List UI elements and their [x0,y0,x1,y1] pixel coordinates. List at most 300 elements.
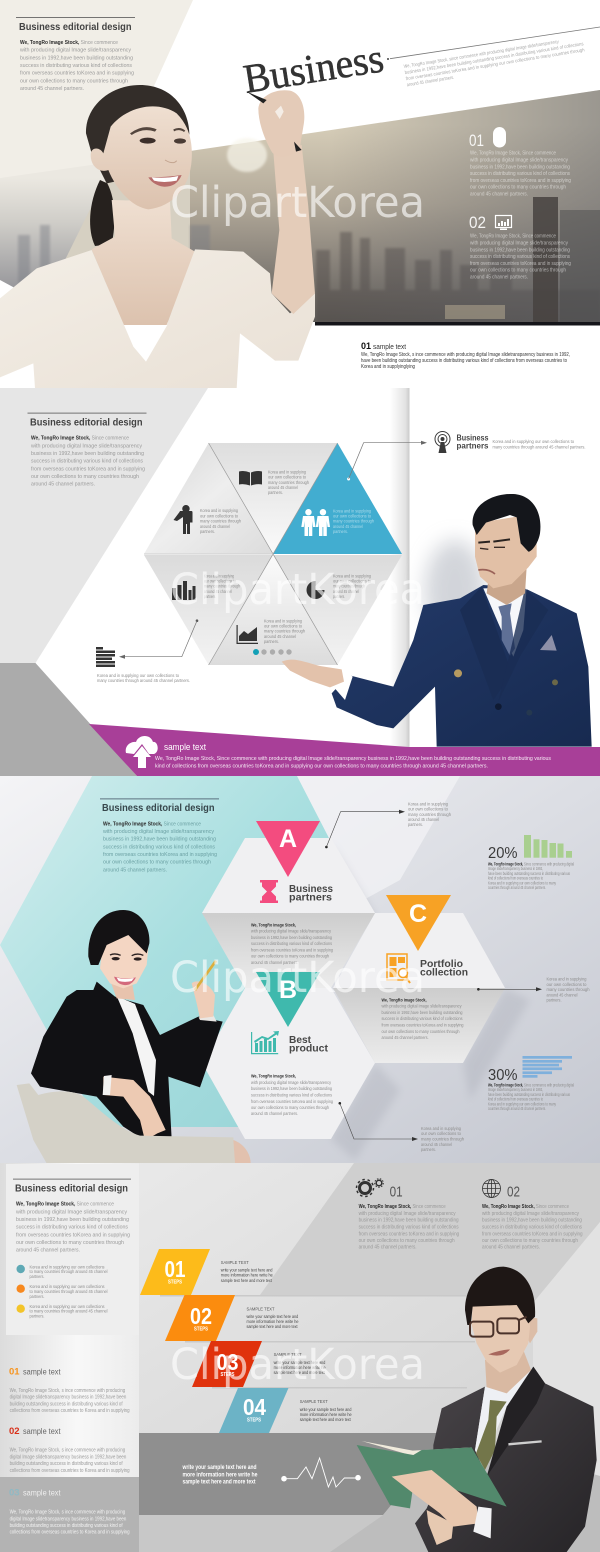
sidebar item 01: 01 [9,1366,20,1378]
top item 02 with globe: 02 [507,1184,520,1200]
top item 02 with globe: We, TongRo Image Stock, Since commence [482,1204,569,1210]
callout: business partners: Business [456,433,489,443]
text: blue triangle: our own collections to [333,514,371,519]
body text B: from overseas countries toKorea and in supplying [251,1099,333,1104]
sidebar item 02: digital Image slidetransparency business in 1992,have been [10,1454,126,1460]
sidebar item 02 [9,1426,130,1474]
step 02: SAMPLE TEXT [246,1306,275,1312]
stat: 30 percent with blue bars: Image slide/transparency business in 1992, [488,1087,543,1092]
footnote 01 sample text: Korea and in supplyinglying [361,364,415,370]
text: person triangle: partners. [200,529,215,534]
step 02: 02 [190,1303,212,1329]
heading block: with producing digital Image slide/transparency [103,829,214,835]
heading block: business in 1992,have been building outstanding [20,55,133,61]
body text A: our own collections to many countries through [251,954,329,958]
stat: 20 percent with green bars: We, TongRo Image Stock, Since commence with producing digital [488,862,574,866]
step 02: STEPS [194,1326,208,1332]
triangle C [386,895,451,951]
photo: man in navy suit [282,494,592,747]
triangle A [256,821,320,877]
callout: bottom right: our own collections to [421,1131,461,1136]
top item 01 with gears: business in 1992,have been building outstanding [359,1218,459,1224]
stat: 30 percent with blue bars: kind of collections from overseas countries to [488,1096,543,1102]
step 03: 03 [216,1349,238,1375]
text: bar chart triangle: partners. [204,594,216,599]
callout: bottom right: many countries through [421,1136,464,1142]
body text A [251,922,333,965]
callout: business partners: many countries through around 45 channel partners. [492,444,586,450]
heading block: success in distributing various kind of collections [20,63,132,69]
icon: antenna [435,432,450,453]
hexagon diagram [144,443,402,665]
stat: 30 percent with blue bars [488,1056,574,1111]
footnote 01 sample text [361,341,570,370]
stat: 20 percent with green bars: 20% [488,845,518,862]
legend: coloured dots: partners. [30,1294,44,1299]
text: pie chart triangle: Korea and in supplying [333,574,371,578]
body text B: success in distributing various kind of collections [251,1092,333,1098]
city skyline photo [0,90,600,322]
icon: mouse [493,127,506,148]
icon: globe [482,1180,500,1198]
sidebar item 03: building outstanding success in distributing various kind of [10,1523,123,1529]
watermark 1: ClipartKorea [170,178,425,228]
blue bar chart [522,1056,572,1078]
top item 02 with globe: our own collections to many countries through [482,1238,578,1244]
stat: 20 percent with green bars: kind of collections from overseas countries to [488,876,543,880]
heading block: We, TongRo Image Stock, Since commence [31,436,129,442]
hexagon C [333,895,505,1063]
item 01 with mouse icon: from overseas countries toKorea and in supplying [470,178,571,184]
photo: woman writing in the air [0,85,315,388]
hexagon C: C [409,900,427,928]
text: blue triangle [333,508,374,534]
callout: top right: our own collections to [408,806,448,812]
top item 01 with gears: We, TongRo Image Stock, Since commence [359,1204,446,1210]
body text A: around 45 channel partners. [251,960,298,965]
heading block [28,413,146,488]
stat: 20 percent with green bars: countries through around 45 channel partners. [488,885,546,890]
sidebar item 03: collections from overseas countries to Korea and in supplying [10,1530,130,1536]
callout: middle right: our own collections to [546,982,587,987]
step 02 [165,1295,299,1341]
legend: coloured dots [16,1264,108,1318]
item 01 with mouse icon: our own collections to many countries through [470,185,566,191]
heading block: Business editorial design [19,21,132,33]
icon: monitor [496,216,512,230]
text: book triangle: Korea and in supplying [268,470,306,474]
watermark 2: ClipartKorea [170,565,425,615]
text: book triangle: many countries through [268,480,309,485]
grey band with pulse line: sample text here and more text [182,1480,256,1486]
callout: document: Korea and in supplying our own collections to [97,673,179,678]
top item 02 with globe: around 45 channel partners. [482,1245,540,1251]
callout: middle right [477,976,590,1002]
callout: business partners [347,432,586,480]
hexagon A: A [279,825,297,853]
legend: coloured dots: Korea and in supplying our own collections [30,1284,104,1289]
heading block: We, TongRo Image Stock, Since commence [103,821,201,827]
heading block: Business editorial design [30,416,142,428]
heading block: Business editorial design [102,802,214,814]
text: book triangle [268,470,309,495]
top item 01 with gears: 01 [390,1184,403,1200]
watermark 4: ClipartKorea [170,1340,425,1390]
grey band with pulse line: write your sample text here and [182,1465,257,1471]
step 04: more information here write he [300,1412,352,1417]
item 02 with monitor icon: 02 [469,213,486,232]
callout: top right [325,802,451,848]
step 03: write your sample text here and [274,1360,326,1365]
text: blue triangle: around 45 channel [333,524,363,529]
purple banner: sample text [164,742,206,753]
heading block: around 45 channel partners. [16,1248,80,1254]
heading block: around 45 channel partners. [31,482,95,488]
body text C: with producing digital Image slide/transparency [382,1004,462,1008]
item 02 with monitor icon: our own collections to many countries through [470,268,566,274]
heading block: around 45 channel partners. [20,86,84,92]
watermark 3: ClipartKorea [170,953,425,1003]
panel: A B C hexagons layout [0,776,600,1163]
icon: bar chart [172,581,196,600]
step 04: sample text here and more text [300,1417,351,1422]
text: person triangle: our own collections to [200,514,238,518]
hexagon shadows [331,842,530,1160]
top item 01 with gears: around 45 channel partners. [359,1245,417,1251]
hexagon B: product [289,1042,329,1054]
text: person triangle: many countries through [200,518,241,524]
sidebar item 02: sample text [23,1427,61,1436]
heading block: from overseas countries toKorea and in supplying [103,852,217,858]
callout: top right: partners. [408,822,423,827]
heading block [16,17,135,92]
body text A: from overseas countries toKorea and in supplying [251,948,333,952]
rotated intro text: We, TongRo Image Stock, since commence with producing digital Image slide/transparency [403,39,560,70]
footnote 01 sample text: sample text [373,344,406,351]
grey band with pulse line: more information here write he [182,1472,258,1478]
item 01 with mouse icon [469,127,571,197]
body text C: business in 1992,have been building outstanding [382,1010,463,1015]
step 03 [192,1341,326,1387]
stat: 20 percent with green bars: Image slide/transparency business in 1992, [488,866,543,871]
top item 02 with globe: from overseas countries toKorea and in supplying [482,1231,583,1237]
item 01 with mouse icon: with producing digital Image slide/transparency [470,158,568,164]
sidebar item 01: collections from overseas countries to Korea and in supplying [10,1408,130,1414]
icon: two people [301,509,330,536]
panel: hexagon on hand layout [0,388,600,776]
top item 01 with gears: our own collections to many countries through [359,1238,455,1244]
callout: top right: many countries through [408,812,451,817]
heading block: with producing digital Image slide/transparency [16,1209,127,1215]
icon: cloud upload [126,736,158,768]
sidebar item 02: building outstanding success in distributing various kind of [10,1461,123,1467]
step 04: write your sample text here and [300,1407,352,1412]
body text B: our own collections to many countries through [251,1105,329,1110]
legend: coloured dots: to many countries through around 45 channel [30,1269,108,1274]
item 02 with monitor icon: with producing digital Image slide/transparency [470,241,568,247]
heading block: Business editorial design [15,1182,128,1194]
stat: 30 percent with blue bars: 30% [488,1067,518,1084]
heading block: business in 1992,have been building outstanding [31,451,144,457]
stat: 20 percent with green bars: Korea and in supplying our own collections to many [488,880,557,886]
callout: bottom right: around 45 channel [421,1142,452,1147]
stat: 30 percent with blue bars: Korea and in supplying our own collections to many [488,1102,557,1106]
item 01 with mouse icon: 01 [469,131,484,150]
body text A: We, TongRo Image Stock, [251,922,296,928]
text: bar chart triangle: our own collections to [204,579,236,584]
item 02 with monitor icon: success in distributing various kind of collections [470,254,570,260]
heading block: success in distributing various kind of collections [103,844,215,850]
icon: portfolio [387,954,410,983]
heading block: We, TongRo Image Stock, Since commence [16,1202,114,1208]
hexagon A: partners [289,892,332,904]
grey band with pulse line [139,1433,450,1515]
heading block: business in 1992,have been building outstanding [16,1217,129,1223]
heading block [13,1179,131,1254]
body text C: from overseas countries toKorea and in supplying [382,1022,464,1028]
legend: coloured dots: Korea and in supplying our own collections [30,1304,104,1309]
top item 02 with globe: success in distributing various kind of collections [482,1224,582,1230]
text: area chart triangle: Korea and in supplying [264,618,302,624]
legend: coloured dots: to many countries through around 45 channel [30,1289,108,1294]
text: area chart triangle: around 45 channel [264,634,296,639]
item 01 with mouse icon: We, TongRo Image Stock, Since commence [470,151,556,157]
body text C: success in distributing various kind of collections [382,1016,463,1021]
top item 01 with gears [356,1179,459,1251]
top item 02 with globe: business in 1992,have been building outstanding [482,1218,582,1224]
heading block: from overseas countries toKorea and in supplying [16,1232,130,1238]
text: blue triangle: many countries through [333,519,374,524]
heading block: with producing digital Image slide/transparency [31,443,142,449]
diagonal background facets [139,1163,600,1552]
top item 01 with gears: with producing digital Image slide/transparency [359,1211,456,1217]
text: book triangle: around 45 channel [268,485,298,490]
text: pie chart triangle: partners. [333,594,345,599]
legend: coloured dots: partners. [30,1314,44,1318]
photo: man with green book [357,1267,597,1552]
photo: smiling woman in armchair [17,910,251,1163]
heading block: from overseas countries toKorea and in supplying [20,71,134,77]
heading block: our own collections to many countries through [31,474,139,480]
sidebar item 03: sample text [23,1488,61,1498]
step 01 [140,1249,273,1295]
hexagon A: Business [289,883,333,895]
text: blue triangle: partners. [333,529,348,534]
step 01: SAMPLE TEXT [221,1260,249,1265]
black baseline under city [315,322,600,326]
step 02: sample text here and more text [246,1324,298,1329]
hexagon C: Portfolio [420,958,463,970]
handwritten title: Business: Business [240,34,387,102]
text: bar chart triangle: around 45 channel [204,589,232,594]
legend: coloured dots: partners. [30,1274,44,1279]
heading block: from overseas countries toKorea and in supplying [31,466,145,472]
text: person triangle: around 45 channel [200,524,230,529]
item 02 with monitor icon: We, TongRo Image Stock, Since commence [470,234,556,240]
sidebar item 02: We, TongRo Image Stock, s ince commence with producing [10,1448,125,1454]
heading block: our own collections to many countries through [16,1240,124,1246]
callout: middle right: around 45 channel [546,992,578,998]
heading block: our own collections to many countries through [103,860,211,866]
left sidebar [0,1163,139,1477]
step 04: STEPS [247,1418,261,1424]
heading block: around 45 channel partners. [103,867,167,873]
hexagon C: collection [420,966,468,978]
item 01 with mouse icon: success in distributing various kind of collections [470,171,570,177]
text: bar chart triangle [204,574,240,599]
grey corner shape [0,388,208,663]
text: pie chart triangle [333,574,371,599]
icon: hourglass [260,880,278,903]
purple banner: kind of collections from overseas countries toKorea and in supplying our own collections to many countries through around 45 channel partners. [155,764,488,770]
callout: bottom right: partners. [421,1147,436,1152]
body text C: our own collections to many countries through [382,1029,460,1034]
text: area chart triangle: many countries through [264,628,305,634]
diagonal background facet [297,776,460,910]
body text A: with producing digital Image slide/transparency [251,928,332,934]
purple banner: We, TongRo Image Stock, Since commence with producing digital Image slide/transparency business in 1992,have been building outstanding success in distributing various [155,756,551,762]
rotated intro text: around 45 channel partners. [406,75,455,88]
callout: middle right: many countries through [546,987,590,992]
body text B: We, TongRo Image Stock, [251,1074,296,1078]
hexagon A [202,821,375,988]
icon: area chart [236,625,258,644]
icon: text lines [96,647,115,667]
item 02 with monitor icon [469,213,571,281]
top item 01 with gears: success in distributing various kind of collections [359,1224,459,1230]
text: bar chart triangle: Korea and in supplying [204,574,234,578]
top item 02 with globe [482,1180,583,1251]
callout: business partners: Korea and in supplying our own collections to [492,439,574,444]
callout: middle right: partners. [546,998,562,1002]
sidebar item 01 [9,1366,130,1414]
step 01: more information here write he [221,1272,273,1278]
top item 01 with gears: from overseas countries toKorea and in supplying [359,1231,459,1237]
text: pie chart triangle: around 45 channel [333,589,359,594]
icon: gears [356,1179,383,1196]
footnote 01 sample text: We, TongRo Image Stock, s ince commence with producing digital Image slidetransparency business in 1992, [361,352,570,358]
step 04: SAMPLE TEXT [300,1399,328,1404]
body text B: business in 1992,have been building outstanding [251,1086,332,1091]
shadow behind man [425,540,485,640]
stat: 30 percent with blue bars: We, TongRo Image Stock, Since commence with producing digital [488,1082,574,1088]
sidebar item 03: digital Image slidetransparency business in 1992,have been [10,1516,126,1522]
text: book triangle: partners. [268,490,283,495]
heading block [100,798,219,873]
stat: 30 percent with blue bars: countries through around 45 channel partners. [488,1106,546,1111]
legend: coloured dots: Korea and in supplying our own collections [30,1264,104,1270]
heading block: We, TongRo Image Stock, Since commence [20,40,118,46]
sidebar item 02: collections from overseas countries to Korea and in supplying [10,1468,130,1474]
legend: coloured dots: to many countries through around 45 channel [30,1308,108,1314]
text: book triangle: our own collections to [268,475,306,480]
hexagon B: Best [289,1034,311,1046]
text: pie chart triangle: many countries through [333,584,365,589]
footnote 01 sample text: have been building outstanding success in distributing various kind of collections from overseas countries to [361,358,567,364]
heading block: success in distributing various kind of collections [16,1225,128,1231]
triangle B [256,972,320,1027]
footnote 01 sample text: 01 [361,341,371,351]
body text C [382,998,464,1040]
stat: 20 percent with green bars [488,835,574,890]
page gutter shading [390,388,410,747]
callout: bottom right [338,1102,464,1152]
hexagon B [202,972,375,1139]
item 01 with mouse icon: business in 1992,have been building outstanding [470,164,570,170]
sidebar item 01: building outstanding success in distributing various kind of [10,1401,123,1407]
icon: book [239,471,262,486]
heading block: our own collections to many countries through [20,78,128,84]
teal hexagon background [0,776,331,1127]
green bar chart [524,835,572,858]
dark grey corner shape [0,663,137,776]
purple banner [89,724,600,776]
sidebar item 03: We, TongRo Image Stock, s ince commence with producing [10,1510,125,1516]
text: person triangle [200,508,241,534]
sidebar item 03 [9,1488,130,1536]
text: pie chart triangle: our own collections to [333,579,371,584]
body text B [251,1074,333,1116]
item 01 with mouse icon: around 45 channel partners. [470,191,528,197]
callout: top right: around 45 channel [408,817,439,822]
body text B: around 45 channel partners. [251,1111,298,1116]
icon: rising bars [251,1031,279,1054]
step 01: STEPS [168,1280,182,1286]
callout: top right: Korea and in supplying [408,802,448,806]
panel: numbered steps layout [0,1163,600,1552]
step 03: SAMPLE TEXT [274,1352,302,1357]
sidebar item 02: 02 [9,1426,20,1437]
heading block: business in 1992,have been building outstanding [103,837,216,843]
callout: business partners: partners [456,441,489,451]
beige background shape [0,0,193,178]
item 02 with monitor icon: business in 1992,have been building outstanding [470,248,570,254]
pagination dots [253,649,292,655]
panel: business pen layout [0,0,600,388]
text: area chart triangle: our own collections to [264,624,302,628]
icon: standing person [174,505,192,534]
body text C: We, TongRo Image Stock, [382,998,426,1002]
sidebar heading box [6,1164,139,1335]
text: area chart triangle [264,618,305,644]
callout: middle right: Korea and in supplying [546,976,587,982]
text: blue triangle: Korea and in supplying [333,508,371,514]
step 02: more information here write he [246,1319,299,1324]
callout: document [96,619,198,683]
hexagon B: B [279,976,297,1004]
body text B: with producing digital Image slide/transparency [251,1080,332,1085]
callout: document: many countries through around 45 channel partners. [97,678,190,683]
step 03: more information here write he [274,1365,326,1370]
step 01: write your sample text here and [221,1268,273,1272]
pen line from title [387,27,600,60]
sidebar lower dark block [0,1477,139,1552]
step 03: sample text here and more text [274,1370,325,1375]
icon: pulse line [281,1458,361,1487]
step 04: 04 [243,1394,266,1420]
item 02 with monitor icon: around 45 channel partners. [470,275,528,281]
top item 02 with globe: with producing digital Image slide/transparency [482,1211,579,1217]
step 01: sample text here and more text [221,1278,272,1283]
heading block: with producing digital Image slide/transparency [20,48,131,54]
heading block: success in distributing various kind of collections [31,459,143,465]
step 01: 01 [164,1256,186,1282]
callout: bottom right: Korea and in supplying [421,1126,461,1131]
sidebar item 01: sample text [23,1368,61,1376]
sidebar item 03: 03 [9,1488,20,1498]
step 03: STEPS [220,1372,235,1378]
item 02 with monitor icon: from overseas countries toKorea and in supplying [470,261,571,267]
